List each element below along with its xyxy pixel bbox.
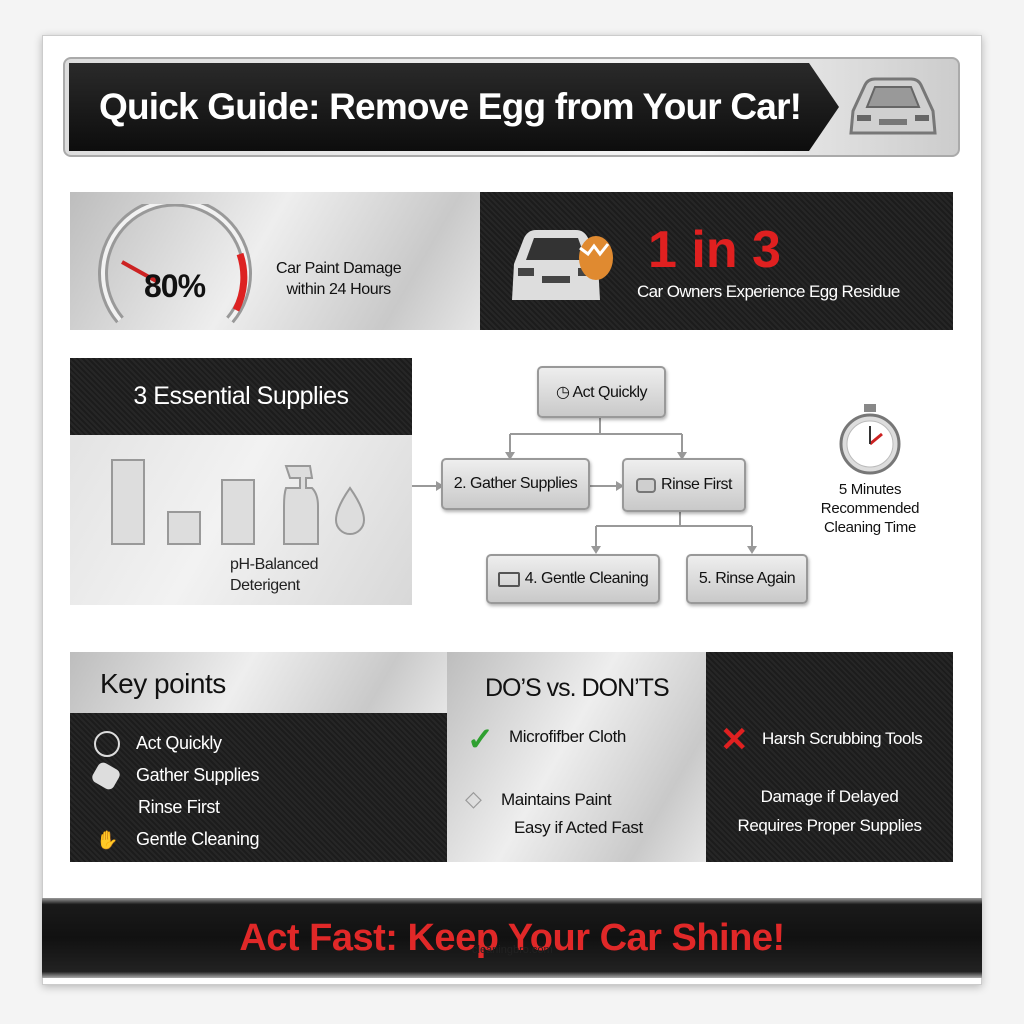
step: rinse again <box>686 554 808 604</box>
panel: dos: ◇ <box>465 786 482 811</box>
stopwatch callout: 5 Minutes <box>839 481 901 498</box>
panel: don'ts: Damage if Delayed <box>761 787 898 806</box>
panel: dos: Microfifber Cloth <box>509 727 626 746</box>
panel: don'ts: Requires Proper Supplies <box>737 816 922 835</box>
panel: dos: DO’S vs. DON’TS <box>485 674 669 702</box>
footer banner <box>42 898 982 978</box>
step: gather supplies <box>441 458 590 510</box>
stat label: Car Paint Damage <box>276 260 401 277</box>
footer banner: Act Fast: Keep Your Car Shine! <box>239 916 785 958</box>
panel: 1 in 3 stat: Car Owners Experience Egg Residue <box>637 282 900 301</box>
list <box>70 713 447 862</box>
icon: car with egg <box>512 230 613 300</box>
heading <box>70 358 412 435</box>
stopwatch callout: Recommended <box>821 500 919 517</box>
panel: key points <box>70 652 447 862</box>
step: act quickly <box>537 366 666 418</box>
stopwatch callout <box>821 404 919 536</box>
heading: 3 Essential Supplies <box>133 382 349 410</box>
step: rinse again: 5. Rinse Again <box>699 570 795 587</box>
panel: dos <box>447 652 706 862</box>
title: Quick Guide: Remove Egg from Your Car! <box>99 86 801 127</box>
list: Gather Supplies <box>136 765 259 785</box>
panel: paint damage stat <box>70 192 480 330</box>
panel: dos: Maintains Paint <box>501 790 611 809</box>
icon: check: ✓ <box>467 721 494 757</box>
supplies illustration <box>111 459 365 545</box>
panel: 3 essential supplies: Deterigent <box>230 577 300 594</box>
panel: don'ts <box>706 652 953 862</box>
title banner <box>63 57 960 157</box>
panel: 1 in 3 stat: 1 in 3 <box>648 221 781 279</box>
step: rinse first: Rinse First <box>661 476 732 493</box>
stat label: within 24 Hours <box>286 281 391 298</box>
step: rinse first <box>622 458 746 512</box>
list: ✋ <box>96 830 118 850</box>
panel: don'ts: Harsh Scrubbing Tools <box>762 729 922 748</box>
step: gather supplies: 2. Gather Supplies <box>454 475 577 492</box>
icon: car <box>849 78 937 134</box>
list: Act Quickly <box>136 733 222 753</box>
list: Rinse First <box>138 797 220 817</box>
gauge <box>98 204 252 324</box>
heading <box>70 652 447 713</box>
list: Gentle Cleaning <box>136 829 259 849</box>
icon: x: ✕ <box>720 721 748 759</box>
panel: dos: Easy if Acted Fast <box>514 818 643 837</box>
panel: 3 essential supplies <box>70 358 412 605</box>
footer banner: cleaningbro.com <box>472 944 553 956</box>
icon: stopwatch <box>840 404 900 474</box>
flowchart <box>412 366 811 608</box>
stopwatch callout: Cleaning Time <box>824 519 916 536</box>
step: gentle cleaning <box>486 554 660 604</box>
step: gentle cleaning: 4. Gentle Cleaning <box>525 570 648 587</box>
panel: paint damage stat: 80% <box>144 268 205 304</box>
step: act quickly: ◷ Act Quickly <box>556 384 647 401</box>
stat label <box>276 260 401 298</box>
panel: 1 in 3 stat <box>480 192 953 330</box>
panel: 3 essential supplies: pH-Balanced <box>230 556 318 573</box>
arrows <box>412 418 757 554</box>
heading: Key points <box>100 668 226 699</box>
